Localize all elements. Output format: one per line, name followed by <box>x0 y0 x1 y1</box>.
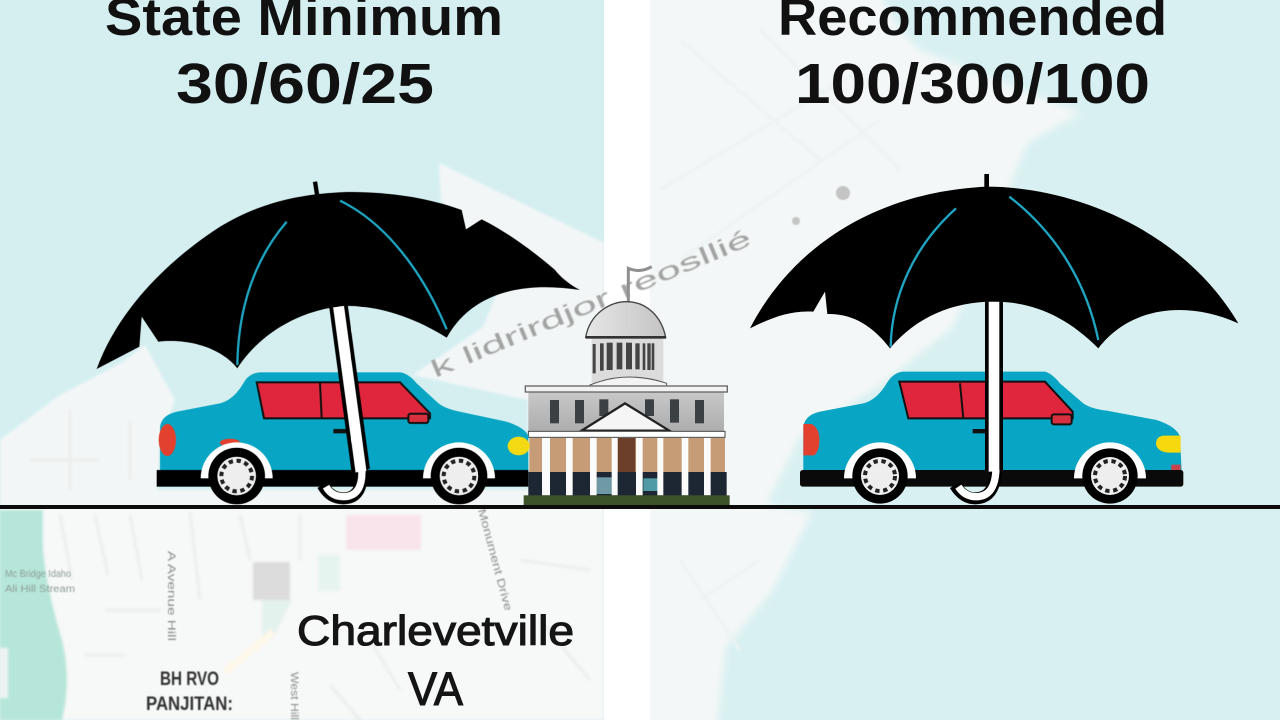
umbrella ribs: left <box>237 201 447 365</box>
rear wheel: right <box>844 442 916 504</box>
building plinth <box>524 495 730 505</box>
building door <box>618 438 635 473</box>
building columns <box>542 438 711 495</box>
umbrella handle: left <box>323 305 362 498</box>
marker light: right <box>1171 465 1181 470</box>
tail light: right <box>803 424 819 455</box>
right car and umbrella <box>750 174 1238 504</box>
map label: small park text: Ali Hill Stream <box>5 584 75 595</box>
car body: left <box>160 372 528 472</box>
map dots <box>792 186 850 225</box>
building entablature <box>528 431 725 437</box>
umbrella handle: right <box>955 302 996 498</box>
panel: white centre strip <box>604 0 650 720</box>
bumper: left <box>157 470 528 487</box>
door handle: right <box>973 429 988 433</box>
building tan wall <box>529 438 725 472</box>
ground line <box>0 505 1280 509</box>
courthouse building <box>524 267 730 505</box>
map label: dark district text: BH RVO <box>160 669 219 690</box>
building upper storey <box>528 392 724 432</box>
car body: right <box>803 372 1182 472</box>
windows: right <box>899 382 1073 424</box>
heading: state minimum limits: 30/60/25 <box>176 52 434 116</box>
label: city name: Charlevetville <box>297 607 574 654</box>
umbrella tip: left <box>315 182 317 197</box>
side marker: left <box>220 439 240 447</box>
map label: rotated street text: k lidrirdjor reosllié <box>427 225 755 384</box>
panel: state minimum map background <box>0 0 604 720</box>
building spire <box>628 267 652 302</box>
building windows <box>550 399 704 423</box>
umbrella ribs: right <box>891 197 1098 347</box>
map label: vertical road text: West Hill <box>288 672 300 720</box>
building cornice <box>525 386 727 392</box>
building drum <box>586 336 667 388</box>
umbrella canopy: left <box>97 192 580 369</box>
rear wheel: left <box>201 442 273 504</box>
head light: left <box>508 437 530 455</box>
map label: small park text <box>5 569 75 595</box>
door handle: left <box>333 429 348 433</box>
building dark base <box>528 472 727 496</box>
windows: left <box>257 382 430 423</box>
panel: recommended map background <box>640 0 1280 720</box>
umbrella tip: right <box>984 174 989 188</box>
label: state: VA <box>408 662 464 715</box>
left car and umbrella <box>97 182 580 504</box>
building dome <box>586 302 666 337</box>
bumper: right <box>800 470 1183 487</box>
map label: small park text: Mc Bridge Idaho <box>5 569 71 580</box>
map label: dark district text <box>146 669 233 715</box>
map label: vertical road text: Monument Drive <box>475 508 514 612</box>
front wheel: left <box>423 442 495 504</box>
heading: recommended limits: 100/300/100 <box>795 52 1150 116</box>
front wheel: right <box>1074 442 1146 504</box>
head light: right <box>1156 436 1181 453</box>
tail light: left <box>159 424 176 456</box>
umbrella canopy: right <box>750 187 1238 348</box>
building pediment <box>582 403 669 431</box>
map label: vertical road text <box>165 508 514 720</box>
map label: dark district text: PANJITAN: <box>146 694 233 715</box>
map label: vertical road text: A Avenue Hill <box>165 551 177 641</box>
